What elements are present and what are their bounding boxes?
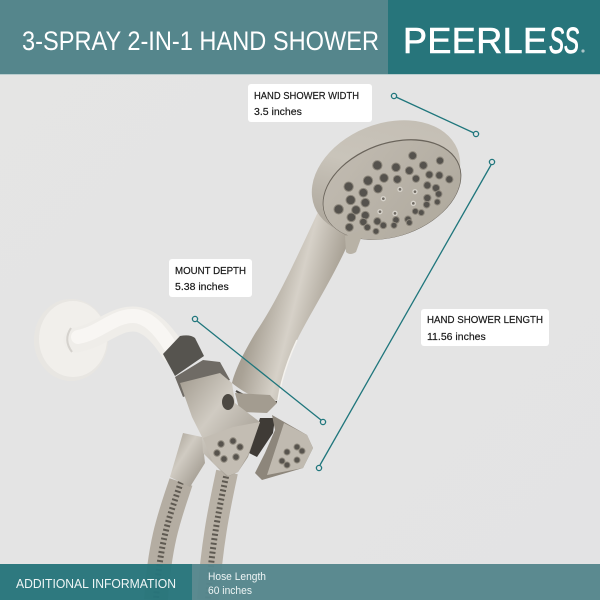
label: hand shower length: 11.56 inches xyxy=(427,331,486,343)
footer: hose length: 60 inches xyxy=(208,585,252,597)
mount collar xyxy=(163,335,230,397)
spray nozzles xyxy=(334,152,453,234)
title: 3-SPRAY 2-IN-1 HAND SHOWER xyxy=(22,26,379,56)
dimension line: width xyxy=(391,93,479,137)
label: hand shower width xyxy=(248,84,372,122)
footer: hose length xyxy=(192,564,600,600)
label: hand shower width: 3.5 inches xyxy=(254,106,302,118)
center nozzles xyxy=(378,187,417,215)
hoses xyxy=(156,472,227,600)
label: mount depth: MOUNT DEPTH xyxy=(175,265,246,277)
label: mount depth: 5.38 inches xyxy=(175,281,229,293)
trigger tab xyxy=(345,230,364,254)
mount body xyxy=(180,373,260,477)
label: mount depth xyxy=(169,259,252,297)
right spray xyxy=(255,415,313,480)
header: logo panel xyxy=(388,0,600,74)
right spray connector xyxy=(249,418,275,457)
footer: hose length: Hose Length xyxy=(208,571,266,583)
dimension line: mount depth xyxy=(192,316,326,425)
hand shower handle xyxy=(232,212,352,402)
label: hand shower length: HAND SHOWER LENGTH xyxy=(427,314,543,326)
dimension line: length xyxy=(316,159,495,471)
handle neck xyxy=(235,393,277,413)
footer: additional information xyxy=(0,564,192,600)
label: hand shower length xyxy=(421,309,549,346)
shower arm and wall flange xyxy=(34,299,174,381)
logo: PEERLE xyxy=(403,20,547,61)
hose clip xyxy=(170,433,205,487)
logo: SS xyxy=(549,20,579,61)
footer: additional information: ADDITIONAL INFORMATION xyxy=(16,576,176,591)
header: title panel xyxy=(0,0,388,74)
label: hand shower width: HAND SHOWER WIDTH xyxy=(254,90,359,102)
shower head xyxy=(294,99,478,258)
